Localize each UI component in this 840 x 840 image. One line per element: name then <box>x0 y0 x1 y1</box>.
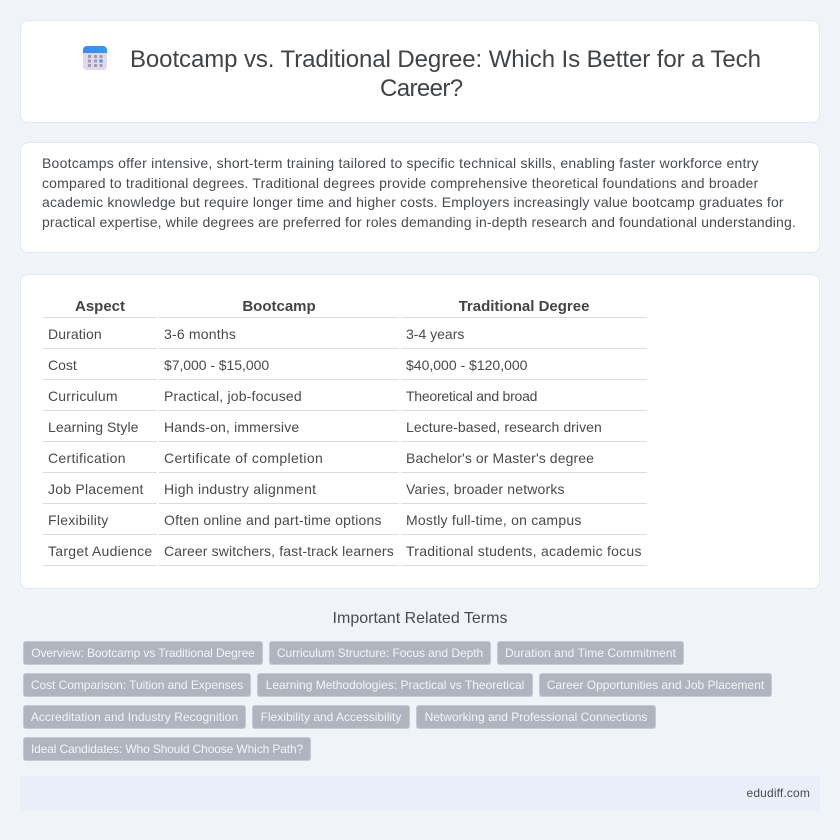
related term tags <box>23 641 772 761</box>
intro text: practical expertise, while degrees are preferred for roles demanding in-depth research and foundational understanding. <box>42 214 796 230</box>
intro text: compared to traditional degrees. Traditional degrees provide comprehensive theoretical foundations and broader <box>42 175 758 191</box>
comparison table: Mostly full-time, on campus <box>406 512 582 528</box>
comparison table: Practical, job-focused <box>164 388 302 404</box>
comparison table: Hands-on, immersive <box>164 419 299 435</box>
comparison table: Traditional students, academic focus <box>406 543 642 559</box>
related term tags: Learning Methodologies: Practical vs Theoretical <box>266 678 524 692</box>
comparison table: Theoretical and broad <box>406 388 537 404</box>
comparison table: Duration <box>48 326 102 342</box>
comparison table: Bachelor's or Master's degree <box>406 450 594 466</box>
comparison table: 3-6 months <box>164 326 236 342</box>
panel: comparison table <box>20 274 820 589</box>
title: Bootcamp vs. Traditional Degree: Which Is Better for a Tech <box>130 46 761 73</box>
comparison table: 3-4 years <box>406 326 464 342</box>
panel: intro <box>20 142 820 253</box>
title <box>130 46 761 102</box>
title: Career? <box>380 75 463 102</box>
related term tags: Duration and Time Commitment <box>505 646 676 660</box>
comparison table: Learning Style <box>48 419 138 435</box>
related term tags: Ideal Candidates: Who Should Choose Which Path? <box>31 742 303 756</box>
intro text <box>42 155 796 230</box>
comparison table: $7,000 - $15,000 <box>164 357 269 373</box>
comparison table: Bootcamp <box>242 298 316 315</box>
footer source text: edudiff.com <box>747 786 810 800</box>
comparison table: Curriculum <box>48 388 118 404</box>
comparison table: Lecture-based, research driven <box>406 419 602 435</box>
related term tags: Cost Comparison: Tuition and Expenses <box>31 678 243 692</box>
intro text: academic knowledge but require longer time and higher costs. Employers increasingly value bootcamp graduates for <box>42 194 784 210</box>
comparison table: Certificate of completion <box>164 450 323 466</box>
heading: related terms: Important Related Terms <box>333 610 507 627</box>
icon: calendar <box>83 46 107 70</box>
related term tags: Career Opportunities and Job Placement <box>547 678 764 692</box>
comparison table: Flexibility <box>48 512 109 528</box>
footer bar <box>20 776 820 810</box>
comparison table: Cost <box>48 357 77 373</box>
comparison table: Often online and part-time options <box>164 512 382 528</box>
comparison table: Career switchers, fast-track learners <box>164 543 394 559</box>
related term tags: Overview: Bootcamp vs Traditional Degree <box>31 646 255 660</box>
comparison table: High industry alignment <box>164 481 316 497</box>
comparison table: Job Placement <box>48 481 144 497</box>
related term tags: Flexibility and Accessibility <box>261 710 401 724</box>
related term tags: Curriculum Structure: Focus and Depth <box>277 646 483 660</box>
comparison table: Aspect <box>75 298 125 315</box>
intro text: Bootcamps offer intensive, short-term training tailored to specific technical skills, enabling faster workforce entry <box>42 155 759 171</box>
related term tags: Accreditation and Industry Recognition <box>31 710 238 724</box>
comparison table: Target Audience <box>48 543 152 559</box>
comparison table: Traditional Degree <box>459 298 589 315</box>
header panel <box>20 20 820 123</box>
comparison table: $40,000 - $120,000 <box>406 357 527 373</box>
comparison table: Certification <box>48 450 126 466</box>
related term tags: Networking and Professional Connections <box>425 710 647 724</box>
comparison table <box>43 298 647 566</box>
comparison table: Varies, broader networks <box>406 481 565 497</box>
